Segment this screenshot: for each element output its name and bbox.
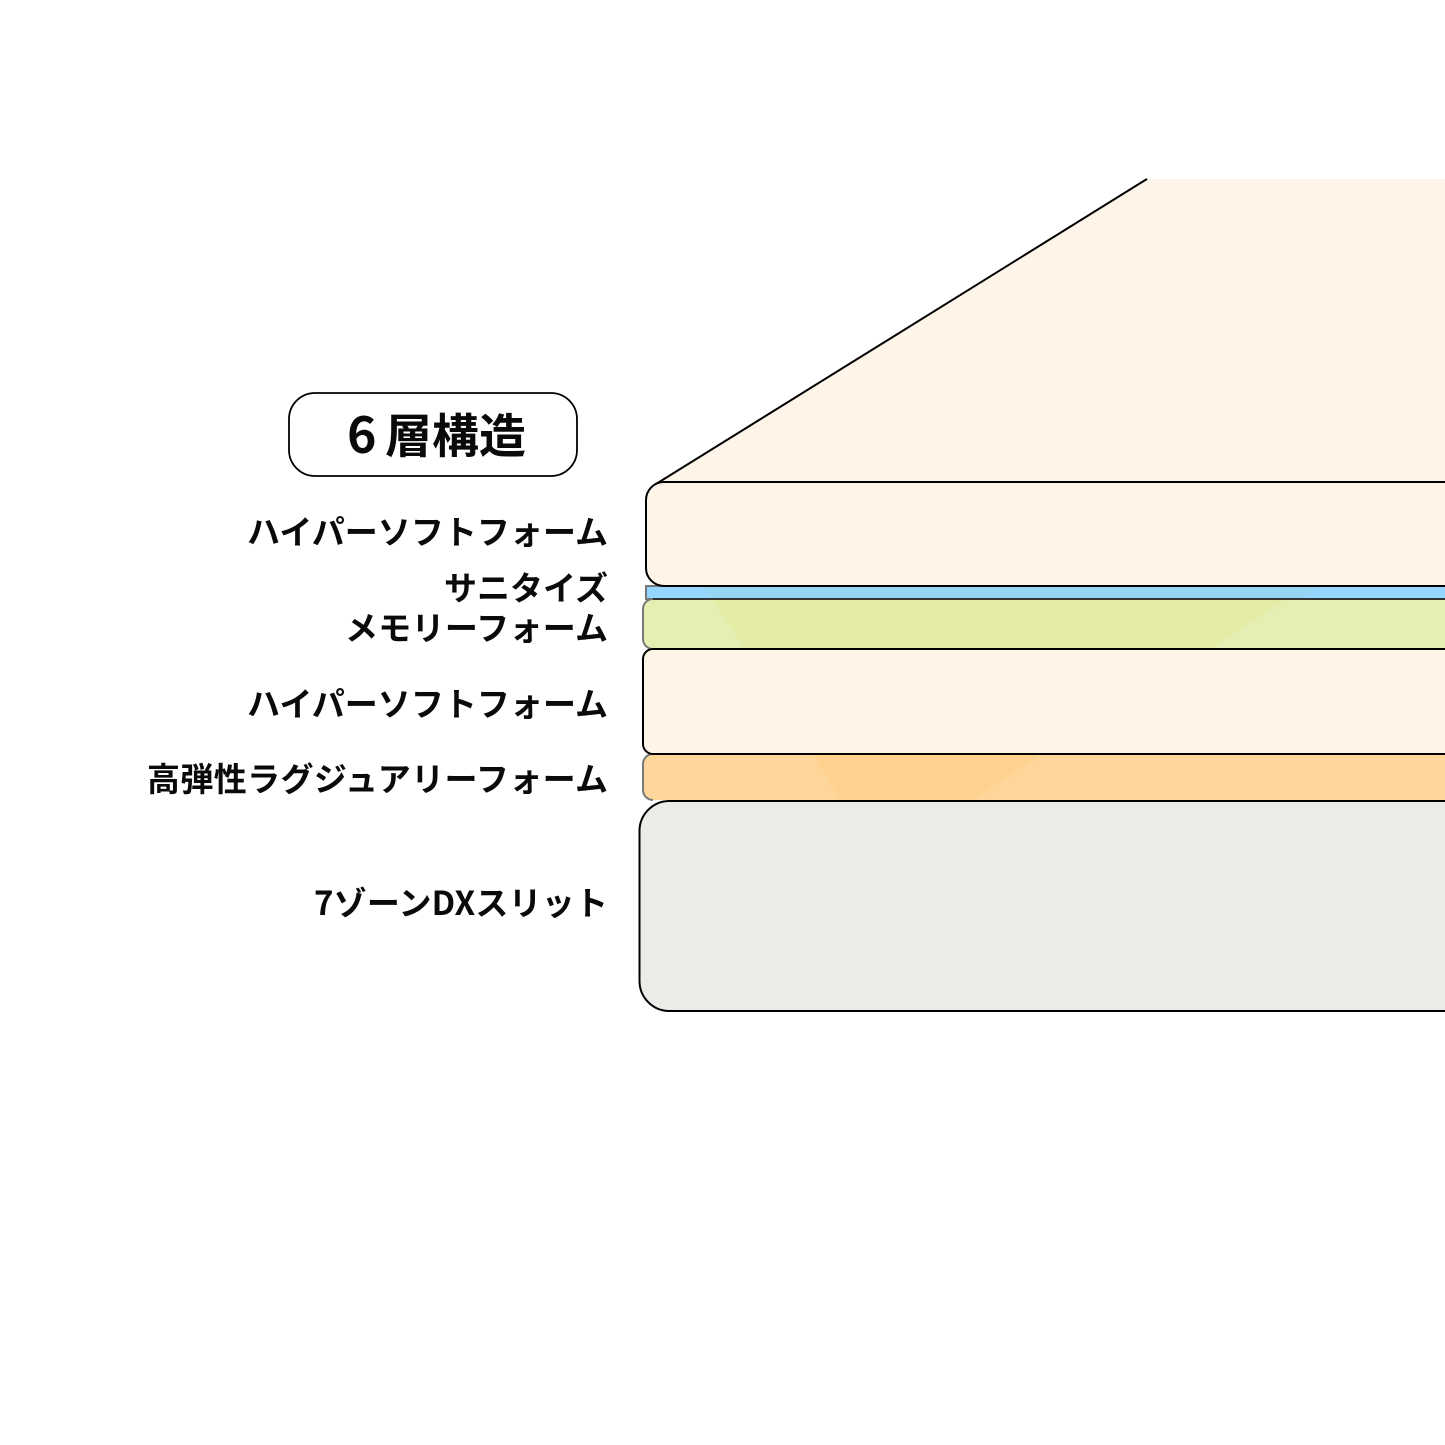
layer: memory foam green	[643, 599, 1445, 649]
label: 7 zone DX slit: 7ゾーンDXスリット	[314, 877, 608, 925]
layer: sanitize blue	[646, 586, 1445, 599]
heading badge: 層構造	[385, 398, 526, 467]
label: high resilience luxury foam: 高弾性ラグジュアリーフォーム	[147, 753, 608, 801]
heading badge: 6	[347, 396, 376, 468]
label: hyper soft foam: ハイパーソフトフォーム	[247, 506, 608, 554]
heading badge	[289, 393, 577, 476]
mattress top surface	[656, 179, 1445, 484]
layer: 7 zone DX slit gray	[640, 801, 1445, 1011]
label: memory foam: メモリーフォーム	[345, 602, 608, 650]
label: sanitize: サニタイズ	[444, 562, 608, 610]
label: hyper soft foam lower: ハイパーソフトフォーム	[247, 678, 608, 726]
layer: hyper soft foam lower	[643, 649, 1445, 754]
layer: high resilience luxury foam orange	[643, 754, 1445, 800]
layer: hyper soft foam top	[646, 482, 1445, 586]
